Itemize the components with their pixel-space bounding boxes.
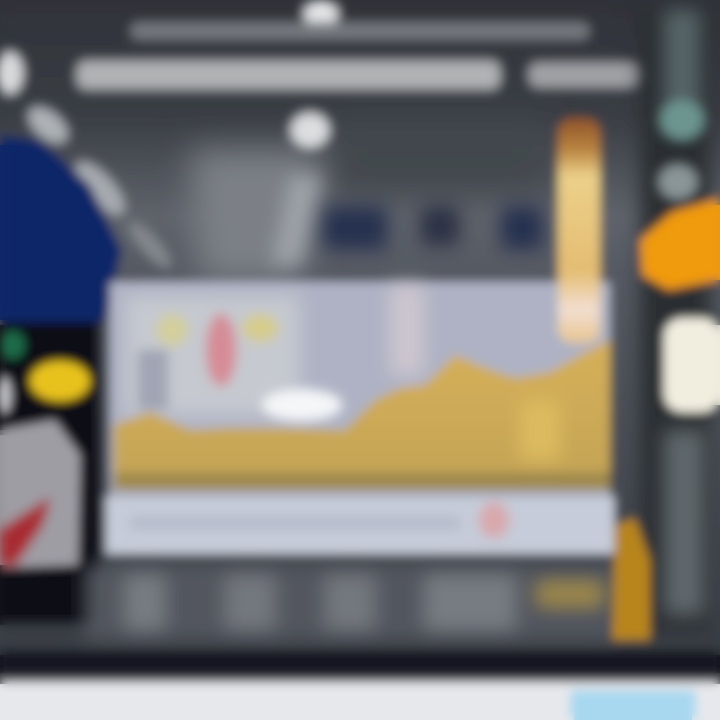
footer band: [0, 682, 720, 720]
strip text shade: [130, 516, 460, 530]
dark lower band: [0, 650, 720, 674]
white highlight: [262, 389, 342, 421]
right teal pillar: [664, 10, 700, 130]
white edge: [0, 377, 11, 413]
red note: [479, 502, 509, 538]
yellow indicator: [30, 361, 90, 401]
title line 1: [130, 22, 590, 40]
chart background: [110, 282, 610, 495]
grey highlight: [658, 164, 698, 200]
title line 2: [76, 60, 501, 90]
left black column: [0, 318, 100, 623]
green accent: [1, 331, 25, 359]
chart panel: [110, 282, 610, 495]
title block: illegible heading lines: [76, 0, 640, 90]
lighter gold patch: [520, 400, 560, 460]
footer blue button: [570, 690, 696, 720]
white oval: [664, 318, 720, 412]
darker baseline: [114, 472, 610, 490]
title top ornament: [303, 0, 339, 28]
lower row of columns: [85, 565, 615, 640]
strip background: [106, 496, 614, 554]
light spot under title: [290, 112, 330, 148]
orange badge: [640, 198, 720, 290]
row of dark blue marks: [322, 206, 544, 250]
background ceiling glow: [190, 120, 550, 280]
red stripe: [0, 498, 50, 565]
diagonal white streak: [0, 51, 177, 273]
lower grey pillar: [664, 430, 704, 615]
grey vehicle body: [0, 420, 80, 568]
title line 2, last word: [528, 62, 640, 88]
gold smear: [535, 580, 605, 608]
upper-left light area: [125, 295, 300, 415]
right column: [640, 10, 720, 630]
left panel: [0, 135, 122, 623]
grey-blue mark: [138, 350, 168, 410]
lower strip: [106, 496, 614, 554]
legend red mark: [206, 314, 236, 386]
right dark column: [640, 10, 710, 630]
legend gold mark: [242, 314, 278, 342]
tall candle marker: [558, 118, 600, 343]
legend yellow mark: [156, 314, 188, 346]
vertical pale stripe: [390, 285, 424, 375]
teal highlight: [660, 100, 704, 140]
navy shape: [0, 135, 122, 322]
gold area chart: [114, 340, 610, 490]
light beam: [272, 175, 322, 265]
gold bar bottom right: [612, 518, 650, 640]
